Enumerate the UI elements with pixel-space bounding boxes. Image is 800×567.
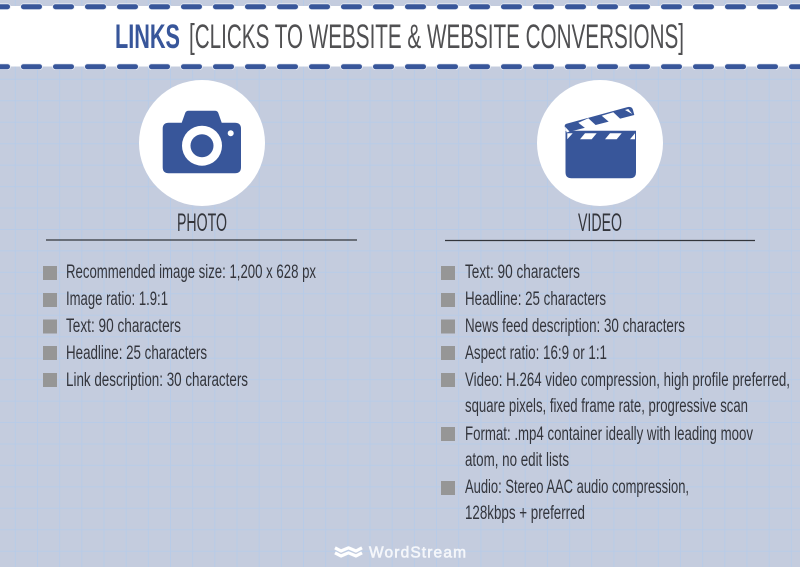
list: photo specs: Recommended image size: 1,200 x 628 px — [66, 262, 316, 283]
heading: video: VIDEO — [578, 209, 622, 237]
panel: photo — [43, 80, 357, 391]
list: video specs: Audio: Stereo AAC audio compression, — [465, 477, 689, 498]
list: video specs: Text: 90 characters — [465, 262, 580, 283]
title banner — [0, 6, 800, 67]
heading: photo: PHOTO — [177, 209, 227, 237]
logo: WordStream: WordStream — [369, 544, 466, 562]
panel: video — [441, 80, 790, 524]
icon: clapperboard — [537, 80, 663, 206]
list: photo specs: Headline: 25 characters — [66, 343, 207, 364]
list: video specs — [441, 262, 790, 524]
list: video specs: 128kbps + preferred — [465, 503, 585, 524]
list: photo specs: Link description: 30 characters — [66, 370, 248, 391]
icon: camera — [139, 80, 265, 206]
list: video specs: atom, no edit lists — [465, 450, 569, 471]
title heading: LINKS — [115, 18, 180, 56]
list: video specs: News feed description: 30 characters — [465, 316, 685, 337]
list: video specs: Headline: 25 characters — [465, 289, 606, 310]
list: photo specs: Text: 90 characters — [66, 316, 181, 337]
list: photo specs: Image ratio: 1.9:1 — [66, 289, 168, 310]
list: video specs: Aspect ratio: 16:9 or 1:1 — [465, 343, 607, 364]
list: photo specs — [43, 262, 316, 391]
